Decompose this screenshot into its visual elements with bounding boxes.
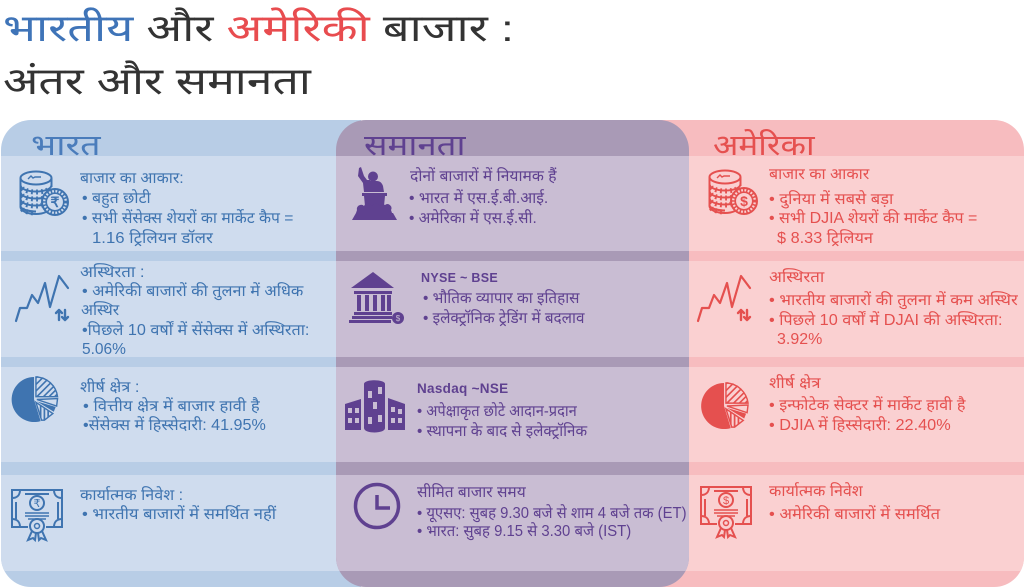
text: top sector (80, 378, 266, 434)
icon: certificate dollar (700, 486, 752, 539)
icon: buildings (345, 380, 405, 432)
icon: coins rupee: ₹ (51, 194, 60, 210)
text: volatility: अस्थिरता (769, 269, 824, 286)
column: similarities content (345, 167, 687, 540)
text: Nasdaq NSE: • स्थापना के बाद से इलेक्ट्रॉनिक (417, 423, 587, 440)
text: volatility (769, 268, 1018, 348)
text: market size: • सभी DJIA शेयरों की मार्केट कैप = (769, 210, 977, 227)
text: NYSE BSE: • इलेक्ट्रॉनिक ट्रेडिंग में बदलाव (423, 310, 584, 327)
text: volatility: • भारतीय बाजारों की तुलना में कम अस्थिर (769, 292, 1018, 309)
text: volatility: अस्थिर (81, 302, 119, 319)
text: Nasdaq NSE: Nasdaq ~NSE (417, 381, 508, 396)
text: market size (80, 170, 293, 247)
text: Nasdaq NSE (417, 381, 588, 440)
heading: USA: अमेरिका (713, 130, 815, 162)
text: NYSE BSE: NYSE ~ BSE (421, 271, 498, 285)
text: top sector: शीर्ष क्षेत्र (769, 375, 821, 392)
text: market size: $ 8.33 ट्रिलियन (777, 230, 873, 247)
panel: USA (650, 120, 1024, 587)
text: market size: 1.16 ट्रिलियन डॉलर (92, 230, 213, 247)
icon: exchange building (349, 272, 404, 324)
text: top sector: शीर्ष क्षेत्र : (80, 379, 139, 396)
text: functional investing (80, 486, 276, 523)
text: limited market hours (417, 483, 687, 540)
text: limited market hours: • यूएसए: सुबह 9.30 बजे से शाम 4 बजे तक (ET) (417, 505, 687, 522)
text: functional investing: • भारतीय बाजारों में समर्थित नहीं (82, 506, 276, 523)
icon: coins dollar (708, 170, 758, 215)
column: India content (11, 170, 309, 542)
text: volatility: • पिछले 10 वर्षों में DJAI की अस्थिरता: (769, 312, 1002, 329)
text: volatility (80, 263, 309, 358)
text: functional investing: कार्यात्मक निवेश : (80, 487, 183, 504)
text: functional investing (769, 482, 940, 523)
text: volatility: •पिछले 10 वर्षों में सेंसेक्स में अस्थिरता: (82, 322, 309, 339)
text: market size: बाजार का आकार: (80, 170, 184, 187)
text: functional investing: • अमेरिकी बाजारों में समर्थित (769, 506, 940, 523)
title: अंतर और समानता (3, 60, 311, 102)
icon: coins rupee (20, 170, 69, 216)
text: market size: • सभी सेंसेक्स शेयरों का मार्केट कैप = (82, 210, 293, 227)
text: regulators (409, 167, 557, 227)
text: limited market hours: सीमित बाजार समय (417, 484, 526, 501)
icon: certificate rupee (11, 489, 63, 542)
text: top sector (769, 374, 966, 434)
text: top sector: • वित्तीय क्षेत्र में बाजार हावी है (83, 398, 260, 415)
text: volatility: अस्थिरता : (80, 264, 145, 281)
title: भारतीय और अमेरिकी बाजार : (3, 7, 514, 49)
title (3, 7, 514, 102)
icon: speaker at podium (352, 167, 397, 220)
text: market size: • दुनिया में सबसे बड़ा (769, 191, 893, 208)
text: Nasdaq NSE: • अपेक्षाकृत छोटे आदान-प्रदान (417, 403, 577, 420)
panel: similarities (336, 120, 689, 587)
icon: certificate dollar: $ (723, 495, 729, 507)
text: market size: बाजार का आकार (769, 166, 869, 183)
text: regulators: • अमेरिका में एस.ई.सी. (409, 210, 537, 227)
text: NYSE BSE (421, 271, 585, 327)
column: USA content (696, 166, 1018, 539)
text: volatility: 3.92% (777, 331, 822, 348)
text: regulators: • भारत में एस.ई.बी.आई. (409, 190, 548, 207)
text: functional investing: कार्यात्मक निवेश (769, 483, 863, 500)
icon: volatility chart (696, 274, 752, 322)
icon: clock (354, 482, 400, 530)
text: top sector: •सेंसेक्स में हिस्सेदारी: 41.95% (83, 417, 266, 434)
heading: India: भारत (31, 130, 101, 162)
text: volatility: 5.06% (82, 341, 126, 358)
heading: similarities: समानता (364, 130, 466, 162)
text: limited market hours: • भारत: सुबह 9.15 से 3.30 बजे (IST) (417, 523, 631, 540)
icon: pie chart (12, 376, 58, 422)
text: volatility: • अमेरिकी बाजारों की तुलना में अधिक (82, 283, 303, 300)
panel: India (1, 120, 361, 587)
text: regulators: दोनों बाजारों में नियामक हैं (410, 168, 557, 185)
icon: volatility chart (14, 274, 70, 322)
icon: certificate rupee: ₹ (34, 498, 40, 510)
icon: pie chart (701, 382, 749, 429)
text: top sector: • इन्फोटेक सेक्टर में मार्केट हावी है (769, 397, 966, 414)
icon: coins dollar: $ (740, 193, 748, 209)
icon: exchange building: $ (396, 314, 401, 323)
text: market size (769, 166, 977, 247)
text: NYSE BSE: • भौतिक व्यापार का इतिहास (423, 290, 580, 307)
text: top sector: • DJIA में हिस्सेदारी: 22.40% (769, 417, 951, 434)
text: market size: • बहुत छोटी (82, 190, 151, 207)
